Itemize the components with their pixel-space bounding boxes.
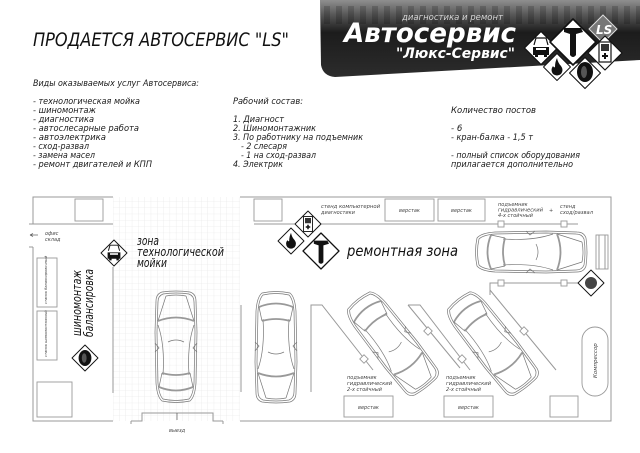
compressor: Компрессор — [593, 343, 599, 378]
posts list: Количество постов — [451, 106, 536, 116]
staff list: - 2 слесаря — [241, 142, 287, 152]
repair zone top equipment: стенд — [560, 204, 576, 210]
repair zone top equipment: + — [549, 208, 553, 214]
repair zone top equipment: стенд компьютерной — [321, 204, 381, 210]
repair zone top equipment — [254, 199, 594, 221]
staff list: 2. Шиномонтажник — [233, 124, 317, 134]
exit label: выезд — [169, 428, 186, 434]
services list: - диагностика — [33, 115, 94, 125]
lower equipment: гидравлический — [446, 381, 492, 387]
car: top right post — [476, 231, 587, 273]
lift rails — [311, 221, 578, 392]
services list — [33, 79, 199, 170]
compressor — [582, 327, 608, 396]
services list: - автоэлектрика — [33, 133, 106, 143]
staff list: 1. Диагност — [233, 115, 285, 125]
services list: - технологическая мойка — [33, 97, 140, 107]
repair zone top equipment: диагностики — [320, 210, 356, 216]
logo tagline: диагностика и ремонт — [401, 13, 504, 23]
repair zone top equipment: гидравлический — [498, 208, 544, 214]
floor plan — [29, 197, 611, 434]
icon: tire — [72, 345, 98, 371]
tire zone label — [69, 269, 96, 337]
services list: - ремонт двигателей и КПП — [33, 160, 153, 170]
icon: car wash — [101, 240, 127, 266]
walls — [29, 197, 611, 424]
car: repair post 3 — [441, 286, 543, 400]
car: repair post 1 — [255, 292, 297, 403]
wheel alignment stand — [596, 235, 608, 269]
lower equipment: 2-х стойчный — [347, 387, 383, 393]
wash zone label: зона — [137, 233, 159, 248]
lower equipment: подъемник — [347, 375, 377, 381]
exit label — [169, 413, 186, 434]
services list: - сход-развал — [33, 142, 89, 152]
staff list: - 1 на сход-развал — [241, 151, 316, 161]
lower equipment: 2-х стойчный — [446, 387, 482, 393]
repair zone top equipment: 4-х стойчный — [498, 213, 534, 219]
logo banner — [320, 0, 640, 88]
services list: Виды оказываемых услуг Автосервиса: — [33, 79, 199, 89]
repair zone label: ремонтная зона — [346, 242, 458, 260]
icon: wheel disc — [578, 270, 604, 296]
tire zone label: балансировка — [81, 269, 96, 337]
lower equipment: гидравлический — [347, 381, 393, 387]
wash zone label — [137, 233, 224, 270]
services list: - шиномонтаж — [33, 106, 96, 116]
wash zone label: мойки — [137, 255, 167, 270]
staff list: 3. По работнику на подъемник — [233, 133, 364, 143]
staff list: Рабочий состав: — [233, 97, 303, 107]
logo subtitle: "Люкс-Сервис" — [396, 46, 515, 62]
repair zone top equipment: верстак — [399, 208, 420, 214]
left zone equipment: станок шиномонтажный — [44, 310, 48, 357]
left zone equipment: станок балансировочный — [44, 255, 48, 304]
staff list: 4. Электрик — [233, 160, 284, 170]
wash zone label: технологической — [137, 244, 224, 259]
posts list: - полный список оборудования — [451, 151, 580, 161]
services list: - автослесарные работа — [33, 124, 139, 134]
office label and arrow: офис — [45, 231, 59, 237]
office label and arrow: склад — [45, 237, 61, 243]
tire zone label: шиномонтаж — [69, 269, 84, 336]
car: repair post 2 — [341, 286, 443, 400]
logo icons: LS — [596, 23, 612, 37]
office label and arrow — [30, 231, 61, 243]
posts list: прилагается дополнительно — [451, 160, 573, 170]
lower equipment — [344, 375, 578, 417]
lower equipment: подъемник — [446, 375, 476, 381]
posts list — [451, 106, 580, 170]
repair zone top equipment: верстак — [451, 208, 472, 214]
icons: repair zone — [278, 211, 339, 269]
lower equipment: верстак — [458, 405, 479, 411]
logo icons — [524, 15, 622, 88]
lower equipment: верстак — [358, 405, 379, 411]
services list: - замена масел — [33, 151, 95, 161]
posts list: - кран-балка - 1,5 т — [451, 133, 534, 143]
title: ПРОДАЕТСЯ АВТОСЕРВИС "LS" — [33, 30, 289, 51]
left zone equipment — [37, 199, 103, 417]
repair zone top equipment: подъемник — [498, 202, 528, 208]
wash zone grid — [113, 197, 240, 421]
logo name: Автосервис — [342, 18, 516, 49]
car: wash bay — [155, 291, 197, 402]
repair zone top equipment: сход/развал — [560, 210, 594, 216]
staff list — [233, 97, 364, 170]
posts list: - 6 — [451, 124, 463, 134]
